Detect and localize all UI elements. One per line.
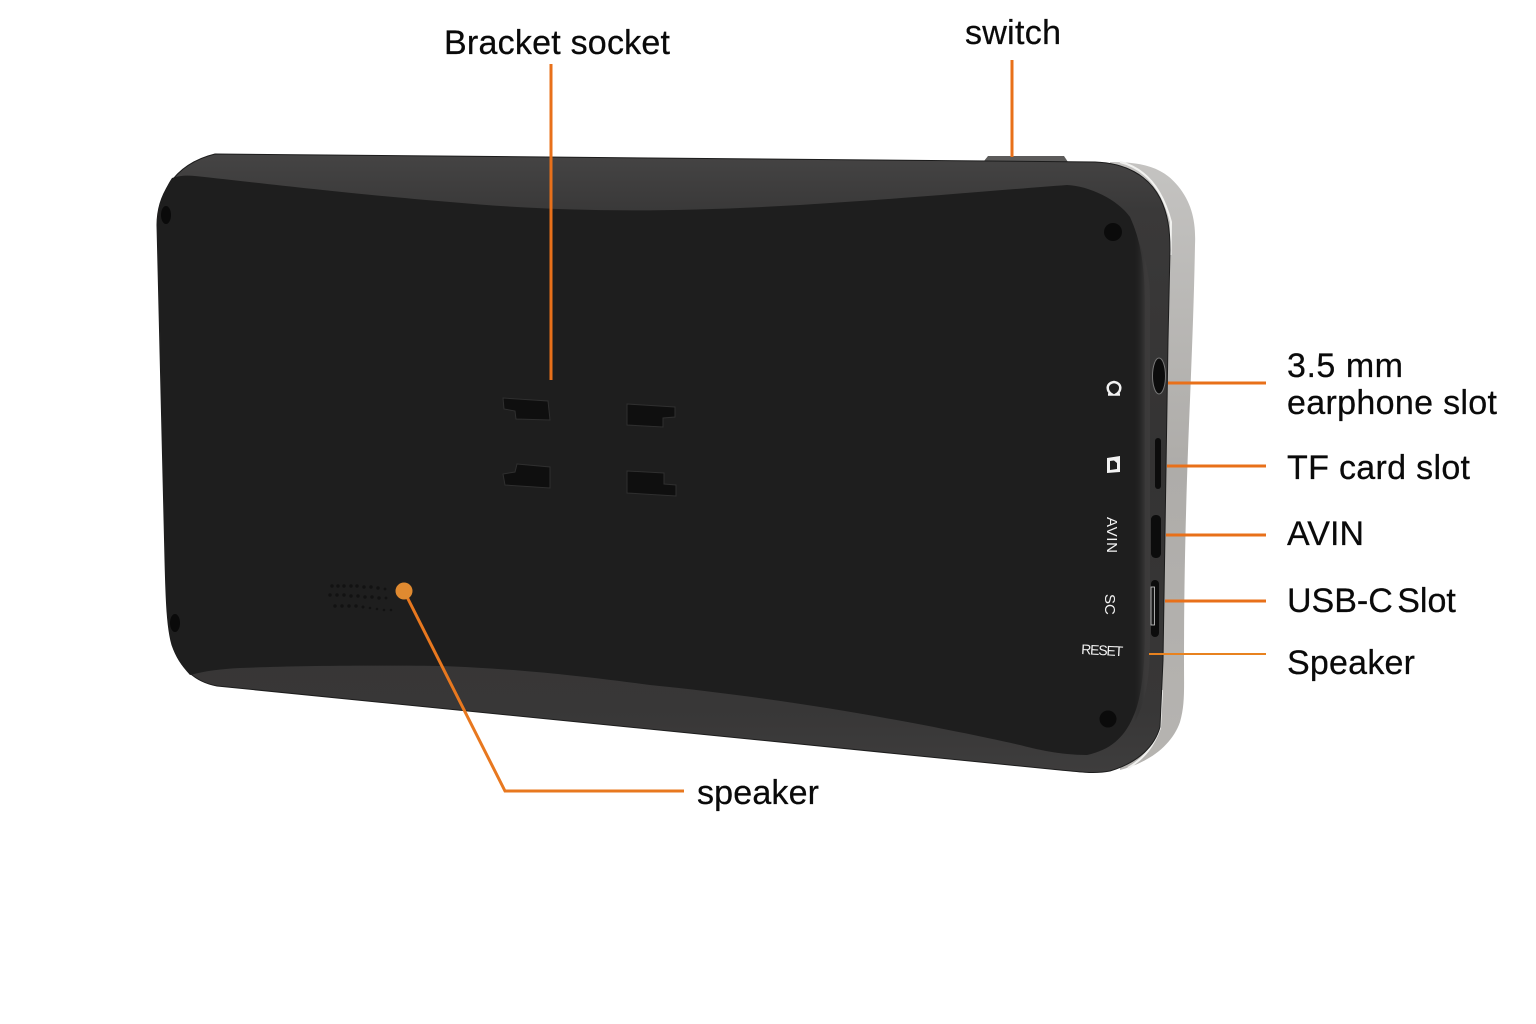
marking: AVIN: AVIN <box>1103 517 1120 553</box>
device: rear view <box>157 154 1195 773</box>
silver side shell <box>1110 162 1195 770</box>
leader line <box>1010 60 1014 157</box>
label: speaker <box>697 774 819 812</box>
label line 2: earphone slot <box>1287 384 1498 422</box>
label: 3.5 mm <box>1287 347 1403 385</box>
screw: bottom right <box>1100 710 1116 728</box>
port: USB-C contact <box>1151 587 1154 625</box>
label: TF card slot <box>1287 449 1471 487</box>
screw: bottom left <box>170 614 180 632</box>
white edge highlight <box>1120 162 1171 768</box>
speaker grille <box>328 584 392 611</box>
leader line <box>1166 534 1266 536</box>
port: TF card slot <box>1155 438 1161 489</box>
label: Speaker <box>1287 644 1415 682</box>
port: AVIN <box>1151 515 1161 558</box>
callout: speaker (grille) <box>396 582 819 812</box>
screw: top left <box>161 206 171 224</box>
leader line <box>404 591 684 791</box>
marking: RESET: RESET <box>1081 641 1124 659</box>
marking: USB symbol: SC <box>1101 594 1118 615</box>
back cover dark recessed panel <box>158 176 1145 755</box>
label: AVIN <box>1287 515 1364 553</box>
port: earphone jack <box>1152 358 1166 394</box>
port markings <box>1081 382 1124 659</box>
screw holes <box>161 206 1122 728</box>
leader line <box>1168 382 1266 384</box>
slot: upper right <box>627 404 675 427</box>
label: USB-C Slot <box>1287 582 1456 620</box>
back cover bezel <box>157 154 1170 773</box>
slot: lower right <box>627 471 676 496</box>
icon: headphones <box>1108 382 1120 394</box>
slot: lower left <box>503 464 550 488</box>
side ports <box>1151 358 1166 637</box>
leader line <box>1149 653 1266 655</box>
leader line <box>1167 464 1266 468</box>
icon: TF card <box>1107 456 1120 473</box>
label: switch <box>965 14 1061 52</box>
side bezel shading <box>1118 205 1150 740</box>
screw: top right <box>1104 223 1122 241</box>
label: Bracket socket <box>444 24 671 62</box>
bracket socket slots <box>503 398 676 496</box>
switch button <box>984 156 1068 162</box>
leader line <box>1165 600 1266 602</box>
port: USB-C <box>1151 580 1159 637</box>
slot: upper left <box>503 398 550 420</box>
anchor dot <box>396 582 412 600</box>
leader line <box>550 64 552 380</box>
callout: 3.5 mm earphone slot <box>1168 347 1498 422</box>
